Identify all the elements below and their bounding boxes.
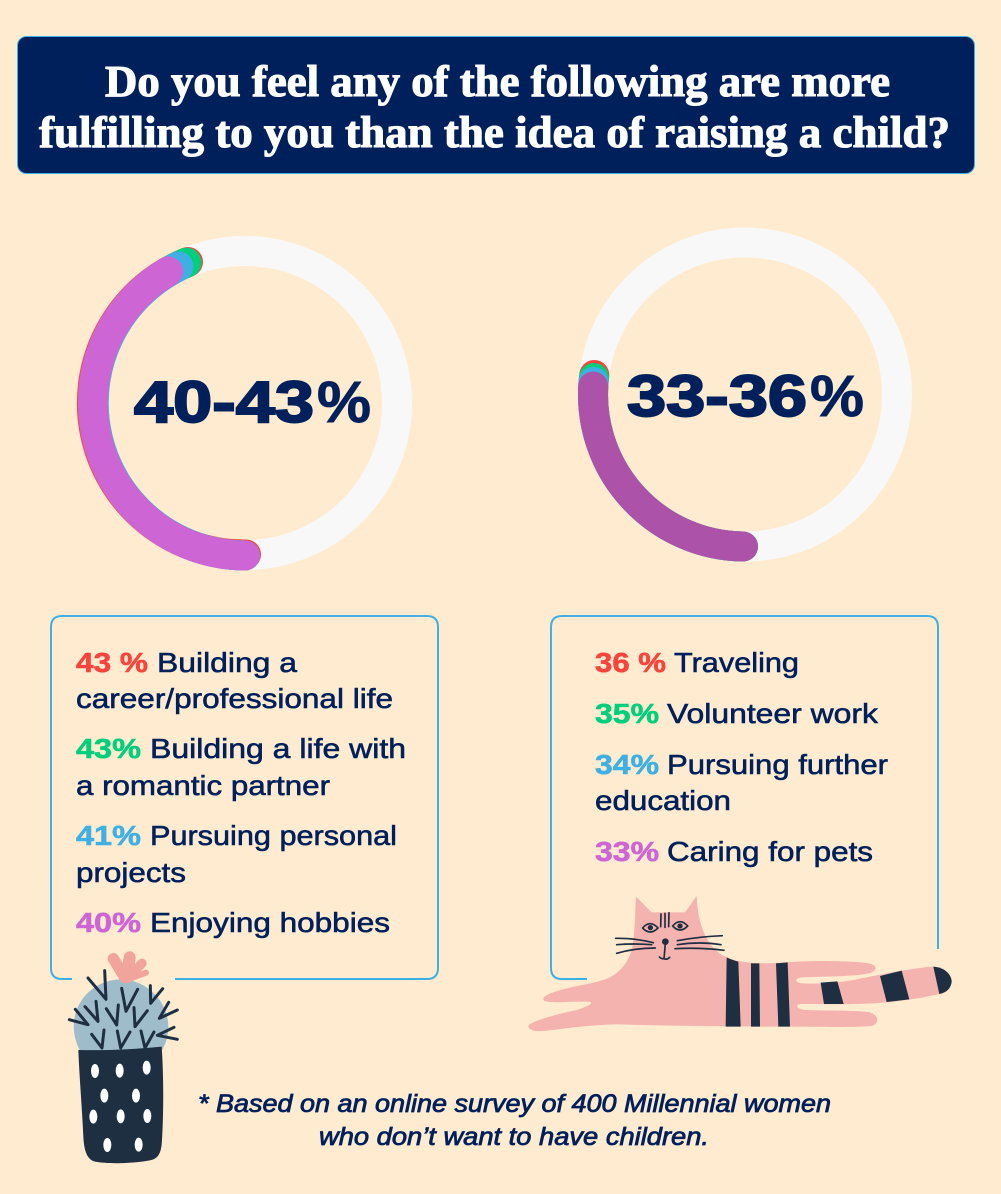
list item: 34% education	[595, 749, 888, 816]
donut value: 33-36%: 33-36	[627, 364, 807, 429]
list item: 43% career: Building a	[157, 647, 297, 678]
donut value: 33-36%	[627, 364, 864, 429]
list item: 41% projects: projects	[76, 857, 186, 888]
list item: 43% partner: a romantic partner	[76, 770, 330, 801]
list item: 43% career: career/professional life	[76, 683, 393, 714]
donut value: 40-43%: 40-43	[134, 370, 314, 435]
icon: cactus	[69, 957, 177, 1163]
list item: 34% education: 34%	[595, 749, 659, 780]
list item: 43% partner: 43%	[76, 733, 141, 764]
footnote	[198, 1090, 831, 1151]
list item: 41% projects: 41%	[76, 820, 141, 851]
list item: 35% volunteer	[595, 698, 879, 729]
list item: 35% volunteer: Volunteer work	[667, 698, 879, 729]
list item: 43% partner	[76, 733, 406, 801]
list item: 43% career	[76, 647, 393, 714]
list item: 41% projects	[76, 820, 397, 888]
donut value: 40-43%: %	[317, 370, 371, 435]
title	[18, 36, 974, 174]
donut value: 33-36%: %	[810, 364, 864, 429]
footnote: * Based on an online survey of 400 Millennial women	[198, 1090, 831, 1118]
list item: 33% pets: 33%	[595, 836, 659, 867]
list item: 34% education: Pursuing further	[667, 749, 888, 780]
list item: 36% traveling	[595, 647, 799, 678]
panel: right list	[551, 616, 938, 979]
list item: 40% hobbies	[76, 907, 390, 938]
list item: 36% traveling: 36 %	[595, 647, 666, 678]
donut value: 40-43%	[134, 370, 371, 435]
list item: 36% traveling: Traveling	[674, 647, 799, 678]
list item: 40% hobbies: 40%	[76, 907, 141, 938]
panel: left list	[51, 616, 438, 979]
list item: 33% pets: Caring for pets	[667, 836, 873, 867]
list item: 41% projects: Pursuing personal	[150, 820, 397, 851]
list item: 35% volunteer: 35%	[595, 698, 659, 729]
icon: cat	[528, 896, 952, 1031]
list item: 33% pets	[595, 836, 873, 867]
list item: 43% career: 43 %	[76, 647, 148, 678]
list item: 34% education: education	[595, 785, 731, 816]
title: fulfilling to you than the idea of raising a child?	[39, 108, 950, 157]
donut chart: 40-43%	[92, 251, 397, 556]
donut chart: 33-36%	[593, 242, 897, 546]
list item: 43% partner: Building a life with	[150, 733, 406, 764]
title: Do you feel any of the following are more	[105, 57, 890, 106]
footnote: who don’t want to have children.	[319, 1123, 709, 1151]
list item: 40% hobbies: Enjoying hobbies	[150, 907, 390, 938]
